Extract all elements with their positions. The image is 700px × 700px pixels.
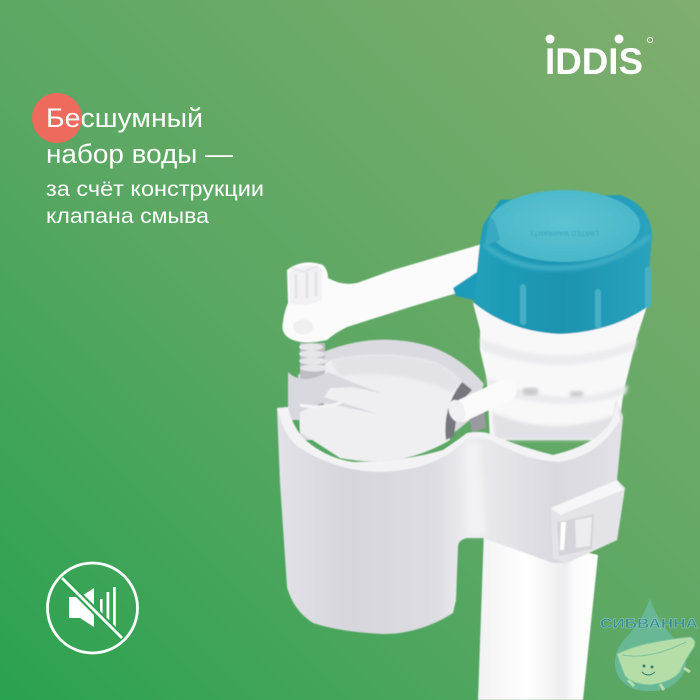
lid notch [484, 216, 500, 246]
accent circle behind heading [32, 93, 82, 143]
cap lid [488, 190, 640, 262]
lid embossed text: LIMITED WARRANTY [529, 229, 599, 236]
arm [282, 244, 482, 342]
subheading: за счёт конструкции [46, 178, 264, 201]
cap side [474, 195, 652, 334]
cap highlight [484, 236, 650, 268]
drop [615, 598, 686, 691]
icon: muted sound [48, 563, 138, 653]
spring [299, 343, 328, 407]
subheading: клапана смыва [46, 205, 209, 228]
heading [46, 103, 233, 169]
bath feet [628, 668, 690, 690]
heading: Бесшумный [46, 103, 203, 133]
bath rim [622, 642, 686, 656]
wordmark: СИБВАННА [600, 615, 698, 631]
heading: набор воды — [46, 139, 233, 169]
clip buckle [551, 480, 625, 563]
subheading [46, 178, 264, 228]
clip band [277, 400, 625, 634]
cap ribs [523, 270, 648, 326]
tube [478, 530, 598, 700]
watermark: Sibvanna [600, 598, 698, 691]
valve body [473, 303, 647, 440]
cup rim and disc [298, 340, 486, 461]
valve illustration [277, 190, 652, 700]
side pin [446, 390, 506, 425]
spring bracket [288, 372, 381, 420]
blue cap [453, 190, 652, 334]
bath [617, 637, 695, 685]
brand logo: IDDIS: IDDIS [545, 41, 643, 82]
cap tab [453, 272, 482, 301]
bath face [642, 664, 655, 675]
